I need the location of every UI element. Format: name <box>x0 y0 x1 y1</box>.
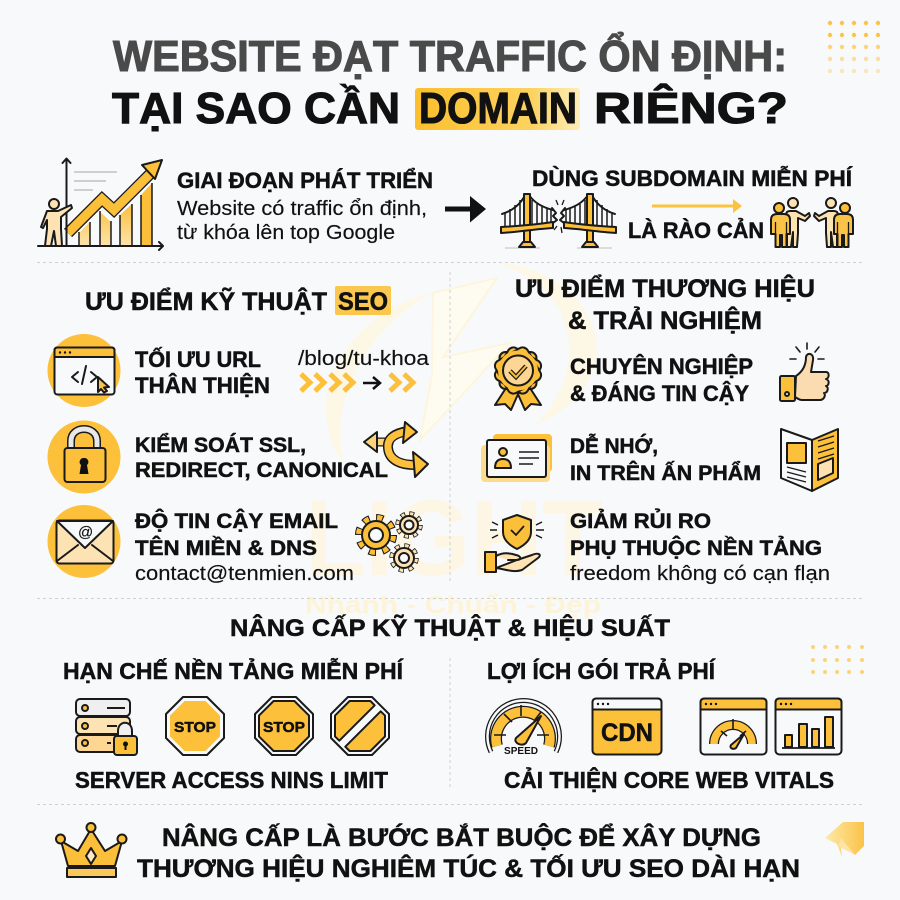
text: growth stage: từ khóa lên top Google <box>177 222 395 244</box>
icon: growth chart with person <box>38 158 163 250</box>
icon: CDN window <box>592 698 662 754</box>
text: core web vitals: CẢI THIỆN CORE WEB VITALS <box>504 765 834 793</box>
text: reduce risk <box>570 509 830 585</box>
title: DOMAIN <box>419 84 577 133</box>
panel: growth stage <box>38 158 853 250</box>
watermark: faint LIGHT logo <box>305 263 603 619</box>
icon: people left <box>771 198 810 247</box>
text: email <box>135 509 354 585</box>
text: server limits: SERVER ACCESS NINS LIMIT <box>75 767 388 793</box>
text: professional: CHUYÊN NGHIỆP <box>570 354 753 379</box>
title: TẠI SAO CẦN <box>112 83 400 133</box>
panel: brand and experience advantages <box>481 273 838 585</box>
icon: crown <box>56 823 126 877</box>
title <box>112 30 788 133</box>
text: email: TÊN MIỀN & DNS <box>135 536 317 560</box>
icon: stop sign 2: STOP <box>263 719 305 736</box>
heading: benefits: LỢI ÍCH GÓI TRẢ PHÍ <box>487 656 716 684</box>
arrow: to subdomain <box>445 196 486 222</box>
url example with arrows <box>298 348 430 391</box>
text: memorable: IN TRÊN ẤN PHẨM <box>570 461 761 485</box>
text: barrier: LÀ RÀO CẢN <box>628 218 764 243</box>
watermark: faint LIGHT logo: Nhanh - Chuẩn - Đẹp <box>305 592 601 619</box>
text: email: contact@tenmien.com <box>135 563 354 585</box>
text: URL: TỐI ƯU URL <box>135 346 261 372</box>
text: URL <box>135 346 270 398</box>
icon: broken bridge <box>501 194 616 248</box>
watermark: faint LIGHT logo: LIGHT <box>305 477 603 598</box>
heading: brand: & TRẢI NGHIỆM <box>568 305 762 335</box>
text: professional <box>570 354 753 406</box>
icon: thumbs up <box>780 343 829 401</box>
arrow: yellow <box>652 199 742 213</box>
icon: stop sign 1 <box>166 697 224 755</box>
title: WEBSITE ĐẠT TRAFFIC ỔN ĐỊNH: <box>113 30 787 81</box>
icon: stop sign 2 <box>255 697 313 755</box>
icon: bar chart window <box>776 698 842 754</box>
text: conclusion: THƯƠNG HIỆU NGHIÊM TÚC & TỐI ƯU SEO DÀI HẠN <box>137 853 800 883</box>
text: reduce risk: GIẢM RỦI RO <box>570 509 711 533</box>
text: growth stage: Website có traffic ổn định, <box>177 198 427 220</box>
text: SSL: REDIRECT, CANONICAL <box>135 459 388 482</box>
icon: gears <box>359 514 420 570</box>
url example with arrows: /blog/tu-khoa <box>298 348 430 370</box>
text: memorable: DỄ NHỚ, <box>570 434 658 458</box>
text: growth stage: GIAI ĐOẠN PHÁT TRIỂN <box>177 168 433 193</box>
title: RIÊNG? <box>594 83 788 133</box>
icon: CDN window: CDN <box>601 719 653 747</box>
text: growth stage <box>177 168 433 244</box>
decoration: middle dot grid <box>811 645 864 674</box>
icon: speed gauge <box>488 701 560 757</box>
heading: SEO: ƯU ĐIỂM KỸ THUẬT <box>85 286 327 316</box>
icon: shield and hand <box>485 515 544 572</box>
icon: padlock <box>48 420 120 494</box>
text: memorable <box>570 434 761 485</box>
text: professional: & ĐÁNG TIN CẬY <box>570 381 749 406</box>
heading: limits: HẠN CHẾ NỀN TẢNG MIỄN PHÍ <box>63 656 404 684</box>
panel: free platform limits <box>63 656 404 793</box>
text: email: ĐỘ TIN CẬY EMAIL <box>135 509 338 533</box>
text: conclusion <box>137 822 800 883</box>
heading: upgrade section: NÂNG CẤP KỸ THUẬT & HIỆU SUẤT <box>230 614 670 642</box>
icon: ID card <box>481 434 552 482</box>
icon: server with lock <box>76 699 137 755</box>
panel: conclusion <box>56 822 864 883</box>
icon: email envelope <box>48 505 120 578</box>
icon: URL window <box>48 334 120 407</box>
icon: performance gauge window <box>700 698 766 754</box>
title highlight: DOMAIN <box>415 88 580 130</box>
text: SSL <box>135 434 388 482</box>
text: reduce risk: PHỤ THUỘC NỀN TẢNG <box>570 536 822 560</box>
icon: people right <box>814 198 853 247</box>
icon: email envelope: @ <box>78 524 93 541</box>
heading: SEO: SEO <box>338 288 388 316</box>
icon: medal <box>493 345 543 410</box>
icon: speed gauge: SPEED <box>504 746 538 757</box>
heading: brand: ƯU ĐIỂM THƯƠNG HIỆU <box>515 273 815 303</box>
icon: logo mark <box>825 822 864 857</box>
icon: redirect arrows <box>364 422 428 477</box>
icon: prohibited sign <box>331 697 389 755</box>
text: SSL: KIỂM SOÁT SSL, <box>135 434 306 457</box>
text: subdomain heading: DÙNG SUBDOMAIN MIỄN PHÍ <box>532 165 853 191</box>
text: reduce risk: freedom không có cạn flạn <box>570 563 830 585</box>
icon: stop sign 1: STOP <box>174 719 216 736</box>
text: URL: THÂN THIỆN <box>135 373 270 398</box>
panel: paid plan benefits <box>487 656 842 793</box>
panel: SEO technical advantages <box>48 286 430 585</box>
icon: brochure <box>781 429 838 491</box>
heading: brand <box>515 273 815 335</box>
decoration: top-right dot grid <box>828 21 880 73</box>
text: conclusion: NÂNG CẤP LÀ BƯỚC BẮT BUỘC ĐỂ XÂY DỰNG <box>162 822 761 852</box>
